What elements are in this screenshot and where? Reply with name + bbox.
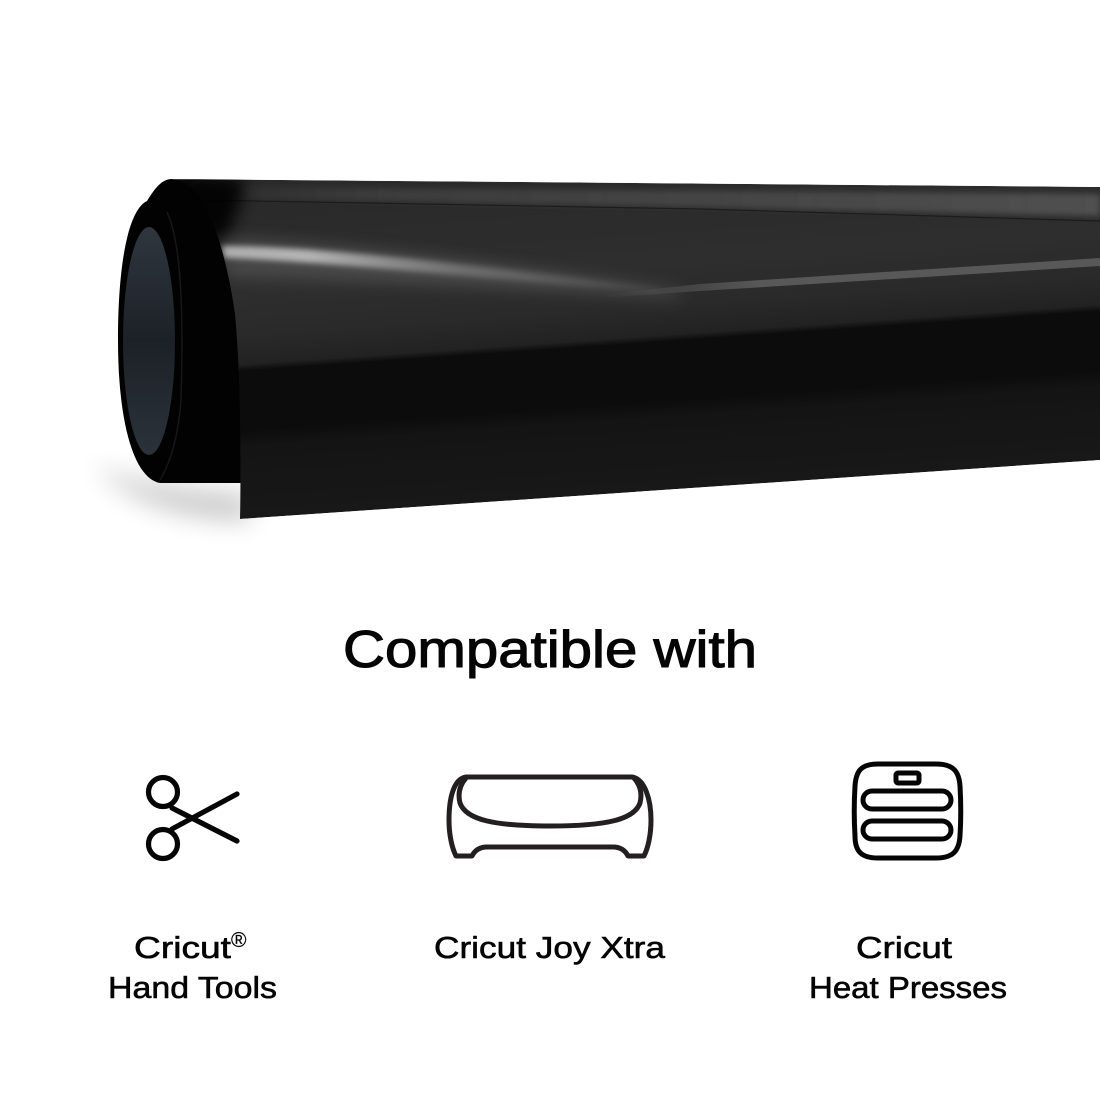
- vinyl sheet: [160, 170, 1100, 519]
- label: Cricut Hand Tools: [108, 929, 277, 1005]
- roll wrap ring edge: [160, 212, 182, 480]
- ground shadow: [95, 465, 250, 520]
- vinyl roll product image: [95, 170, 1100, 520]
- roll inner core: [123, 227, 175, 455]
- icon: Cricut heat press: [854, 764, 961, 858]
- label: Cricut Hand Tools: Cricut: [134, 930, 231, 965]
- label: Cricut Heat Presses: Heat Presses: [809, 970, 1007, 1005]
- thin dark line near the top: [200, 200, 1100, 221]
- label: Cricut Hand Tools: ®: [231, 929, 247, 952]
- top-left curve shadow: [170, 179, 252, 244]
- main glossy highlight: [222, 246, 660, 293]
- roll body: [118, 179, 260, 483]
- label: Cricut Heat Presses: Cricut: [856, 930, 952, 965]
- label: Cricut Hand Tools: Hand Tools: [108, 970, 277, 1005]
- soft highlight glow: [222, 238, 680, 298]
- icon: Cricut Joy Xtra machine: [449, 777, 651, 856]
- right glossy streak: [644, 258, 1100, 294]
- icon: scissors: [148, 778, 237, 858]
- top light band: [240, 187, 1100, 216]
- label: Cricut Heat Presses: [809, 930, 1007, 1005]
- title: Compatible with: [343, 621, 757, 679]
- label: Cricut Joy Xtra: Cricut Joy Xtra: [434, 930, 666, 965]
